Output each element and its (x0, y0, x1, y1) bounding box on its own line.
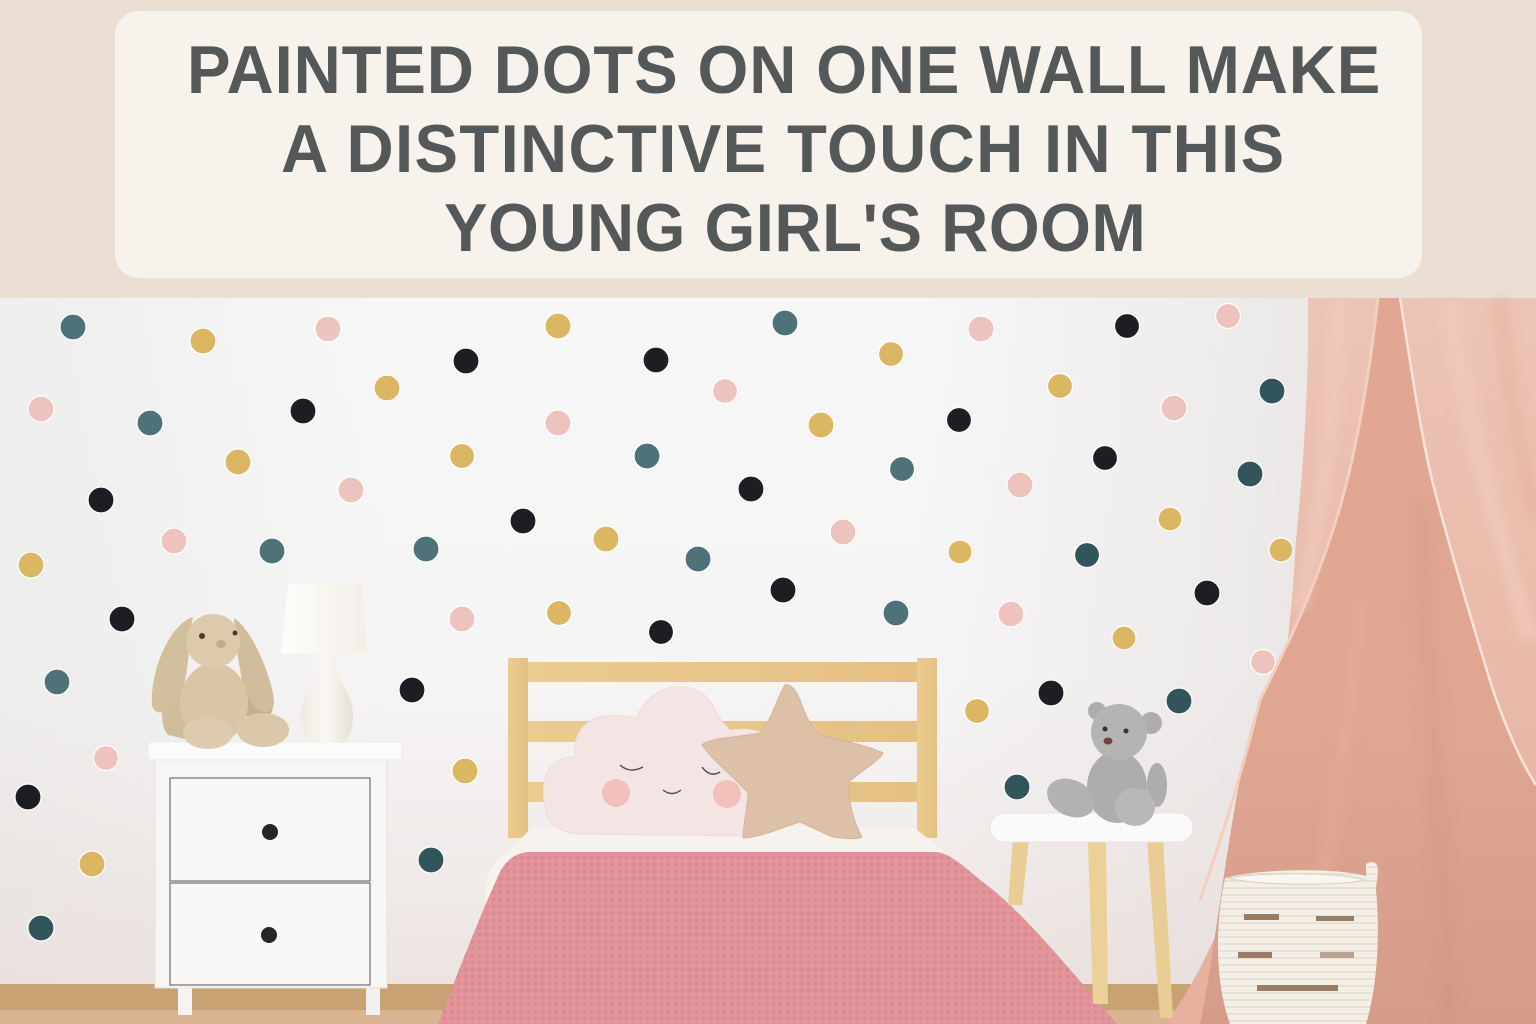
curtain folds (1290, 298, 1536, 1024)
teddy bear (1041, 702, 1167, 826)
curtain inner shadowed opening (1200, 298, 1536, 1024)
lamp (281, 584, 367, 743)
title: A DISTINCTIVE TOUCH IN THIS (281, 112, 1284, 187)
curtain seams (1200, 298, 1378, 900)
nightstand (148, 742, 402, 1015)
polka dots (15, 304, 1293, 941)
bed headboard (508, 658, 937, 838)
cloud pillow (543, 687, 762, 836)
curtain outer panels (1165, 298, 1536, 1024)
curtain canopy (1165, 298, 1536, 1024)
title: PAINTED DOTS ON ONE WALL MAKE (187, 33, 1380, 108)
blanket (438, 852, 1117, 1024)
title: YOUNG GIRL'S ROOM (444, 191, 1146, 266)
skirting board and floor (0, 984, 1536, 1024)
title panel (115, 11, 1422, 278)
mattress (484, 827, 960, 900)
header band (0, 0, 1536, 298)
title (187, 33, 1380, 266)
side table (990, 813, 1193, 1018)
wall (0, 298, 1536, 988)
star pillow (702, 685, 883, 839)
plush bunny (152, 614, 289, 749)
drawer knobs (261, 824, 278, 943)
woven basket (1218, 862, 1378, 1024)
